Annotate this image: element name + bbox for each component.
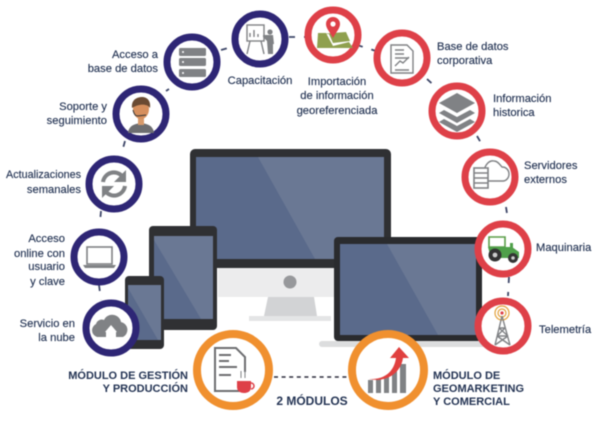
device: phone [125,276,164,349]
label: MÓDULO DE [433,369,500,382]
node: soporte y seguimiento [47,89,166,139]
icon: layers [439,93,475,132]
device: tablet [149,226,217,330]
module: geomarketing y comercial: Y COMERCIAL [433,396,510,408]
icon: presentation board [247,25,274,54]
label: Información [493,93,551,105]
label: Acceso a [112,49,159,61]
node: acceso online: online con [14,248,65,260]
node: importación de información georeferenciada [297,10,378,117]
heading: 2 módulos: 2 MÓDULOS [276,393,348,408]
label: Capacitación [228,75,292,87]
label: Maquinaria [536,242,592,254]
node: acceso online: usuario [28,261,65,273]
module: geomarketing y comercial: GEOMARKETING [433,383,524,395]
module: gestión y producción [68,334,269,406]
icon: server stack [179,48,206,77]
node: acceso online [14,232,124,288]
device: desktop monitor [190,149,391,321]
label: Servidores [524,160,578,172]
icon: support agent [128,97,154,133]
icon: antenna tower [495,306,510,345]
node: actualizaciones semanales: semanales [27,184,81,196]
module: geomarketing y comercial [352,334,524,408]
node: importación de información georeferenciada: de información [300,90,374,102]
icon: tractor [488,237,519,263]
icon: refresh arrows [102,170,126,198]
node: información histórica [432,86,551,136]
node: información histórica: historica [493,107,535,119]
node: servicio en la nube: la nube [38,332,75,344]
label: Base de datos [437,41,509,53]
node: servidores externos [465,152,578,202]
label: Importación [308,76,366,88]
label: Actualizaciones [6,169,81,181]
node: maquinaria [478,224,592,274]
icon: laptop [83,247,116,268]
icon: map with pin [317,17,353,48]
label: Soporte y [59,101,107,113]
icon: server and cloud [474,161,509,188]
node: base de datos corporativa [377,33,509,83]
connector: dotted line between modules [274,376,347,378]
label: Telemetría [539,324,592,336]
module: gestión y producción: Y PRODUCCIÓN [103,382,188,395]
icon: growth chart with arrow [368,347,409,393]
device: laptop [319,237,490,347]
label: Servicio en [20,318,75,330]
node: telemetría [478,301,592,351]
node: base de datos corporativa: corporativa [437,55,493,67]
node: soporte y seguimiento: seguimiento [47,115,107,127]
node: acceso a base de datos [88,37,217,87]
node: servicio en la nube [20,303,136,353]
label: MÓDULO DE GESTIÓN [68,369,188,382]
label: Acceso [28,233,65,245]
icon: chart document [391,45,413,73]
node: actualizaciones semanales [6,159,139,209]
node: capacitación [228,14,292,87]
icon: document with coffee cup [215,348,254,393]
node: acceso online: y clave [30,276,65,288]
icon: cloud upload [92,315,127,338]
node: servidores externos: externos [524,174,567,186]
node: acceso a base de datos: base de datos [88,63,158,75]
node: importación de información georeferenciada: georeferenciada [297,105,378,117]
